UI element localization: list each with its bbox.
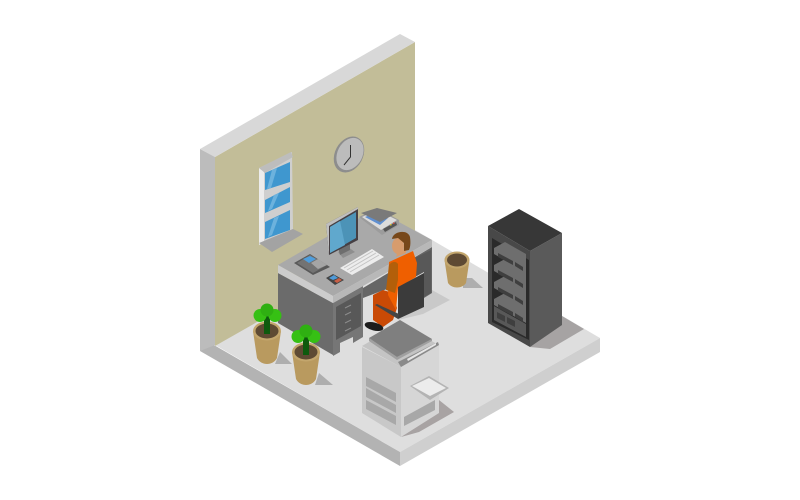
wall clock xyxy=(328,131,370,178)
output tray xyxy=(410,376,449,400)
scanner xyxy=(359,208,399,235)
desk shadow on floor xyxy=(398,290,450,320)
server rack shadow xyxy=(530,316,584,349)
waste bin xyxy=(444,252,483,288)
back wall xyxy=(200,34,415,351)
hair xyxy=(392,232,410,251)
photocopier xyxy=(362,320,449,437)
paper drawers xyxy=(366,377,435,426)
keyboard xyxy=(340,249,384,275)
control strip xyxy=(398,342,439,367)
printer shadow xyxy=(401,400,454,437)
monitor xyxy=(326,207,358,258)
desk xyxy=(278,209,432,356)
server rack xyxy=(488,209,562,347)
arm xyxy=(386,262,398,293)
desk phone xyxy=(294,254,330,275)
shoes xyxy=(364,320,384,333)
floor slab xyxy=(200,230,600,466)
neck xyxy=(396,249,406,257)
legs xyxy=(373,290,397,327)
potted plant right xyxy=(292,324,333,385)
potted plant left xyxy=(253,304,292,364)
servers xyxy=(494,242,526,337)
lid xyxy=(369,338,432,360)
office chair xyxy=(375,273,424,319)
face xyxy=(392,238,404,254)
person in orange xyxy=(364,232,417,333)
window xyxy=(259,152,303,252)
calculator xyxy=(326,274,344,285)
torso xyxy=(388,251,417,310)
